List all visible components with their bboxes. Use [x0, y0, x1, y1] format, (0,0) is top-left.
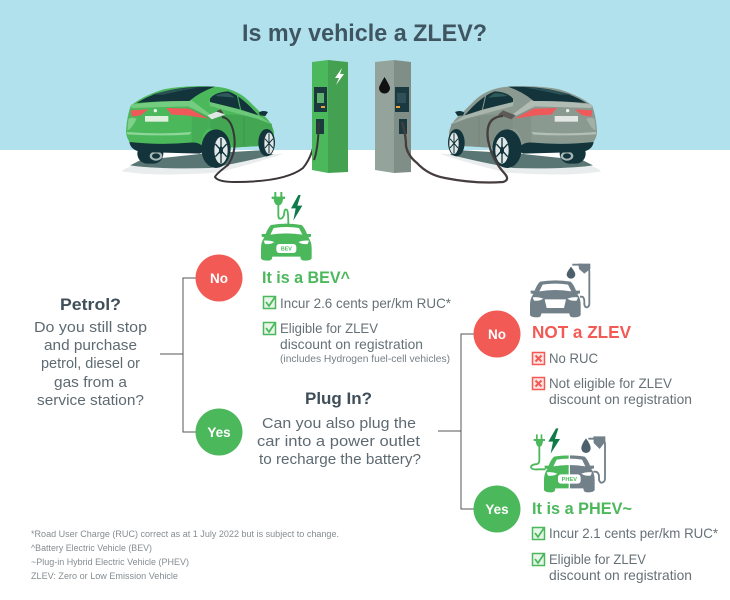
result: BEV: [262, 268, 452, 365]
footnotes: [31, 529, 339, 581]
illustration: grey petrol car: [440, 86, 601, 175]
decision: No (plug in): No: [488, 327, 506, 342]
check item: discount: [532, 551, 692, 583]
decision: Yes (plug in): Yes: [485, 502, 509, 517]
icon: PHEV car with plug and nozzle: PHEV: [562, 477, 577, 483]
question: plug in: Can you also plug the: [262, 415, 416, 432]
title: Is my vehicle a ZLEV?: [242, 20, 487, 47]
result: PHEV: It is a PHEV~: [532, 499, 632, 518]
result: not a ZLEV: [532, 322, 692, 407]
question: plug in: [257, 389, 421, 468]
decision: No (plug in): [474, 310, 520, 358]
question: petrol: gas from a: [54, 374, 128, 391]
icon: BEV car with plug: BEV: [281, 246, 292, 252]
question: petrol: petrol, diesel or: [41, 355, 140, 372]
cross item: discount: [532, 375, 692, 407]
icon: BEV car with plug: [261, 192, 312, 261]
result: PHEV: [532, 499, 719, 583]
cross item: RUC: No RUC: [549, 350, 598, 366]
check item: discount: discount on registration: [549, 567, 692, 583]
footnotes: ~Plug-in Hybrid Electric Vehicle (PHEV): [31, 557, 189, 567]
check item: discount: (includes Hydrogen fuel-cell vehicles): [280, 354, 450, 365]
illustration: electric charging pump: [312, 60, 348, 173]
connector lines: petrol question: [160, 278, 196, 432]
cable: grey car: [402, 116, 507, 182]
check item: discount: [264, 320, 450, 365]
check item: discount: Eligible for ZLEV: [280, 320, 379, 336]
decision: No (petrol): [196, 254, 242, 302]
cable: green car: [215, 117, 317, 182]
icon: oil drop: [379, 77, 390, 94]
question: petrol: [34, 295, 147, 409]
question: petrol: and purchase: [44, 337, 137, 354]
connector lines: plug in question: [438, 334, 474, 509]
decision: No (petrol): No: [210, 271, 228, 286]
icon: petrol car with nozzle: [530, 264, 590, 317]
result: BEV: It is a BEV^: [262, 268, 350, 287]
check item: RUC: Incur 2.6 cents per/km RUC*: [280, 295, 452, 311]
check item: RUC: Incur 2.1 cents per/km RUC*: [549, 525, 719, 541]
decision: Yes (petrol): [196, 408, 242, 456]
check item: discount: discount on registration: [280, 336, 423, 352]
question: petrol: service station?: [37, 392, 144, 409]
icon: lightning bolt: [335, 68, 344, 85]
result: not a ZLEV: NOT a ZLEV: [532, 322, 631, 342]
footnotes: ^Battery Electric Vehicle (BEV): [31, 543, 152, 553]
check item: discount: Eligible for ZLEV: [549, 551, 647, 567]
question: plug in: to recharge the battery?: [259, 451, 421, 468]
decision: Yes (petrol): Yes: [207, 425, 231, 440]
question: petrol: Do you still stop: [34, 319, 147, 336]
decision: Yes (plug in): [474, 486, 520, 532]
icon: PHEV car with plug and nozzle: [531, 428, 605, 492]
question: petrol: Petrol?: [60, 295, 121, 314]
cross item: discount: discount on registration: [549, 391, 692, 407]
footnotes: ZLEV: Zero or Low Emission Vehicle: [31, 571, 178, 581]
cross item: discount: Not eligible for ZLEV: [549, 375, 673, 391]
footnotes: *Road User Charge (RUC) correct as at 1 July 2022 but is subject to change.: [31, 529, 339, 539]
sky background: [0, 0, 730, 150]
question: plug in: Plug In?: [305, 389, 372, 408]
question: plug in: car into a power outlet: [257, 433, 421, 450]
illustration: green electric car: [122, 86, 283, 175]
illustration: petrol pump: [375, 60, 411, 173]
